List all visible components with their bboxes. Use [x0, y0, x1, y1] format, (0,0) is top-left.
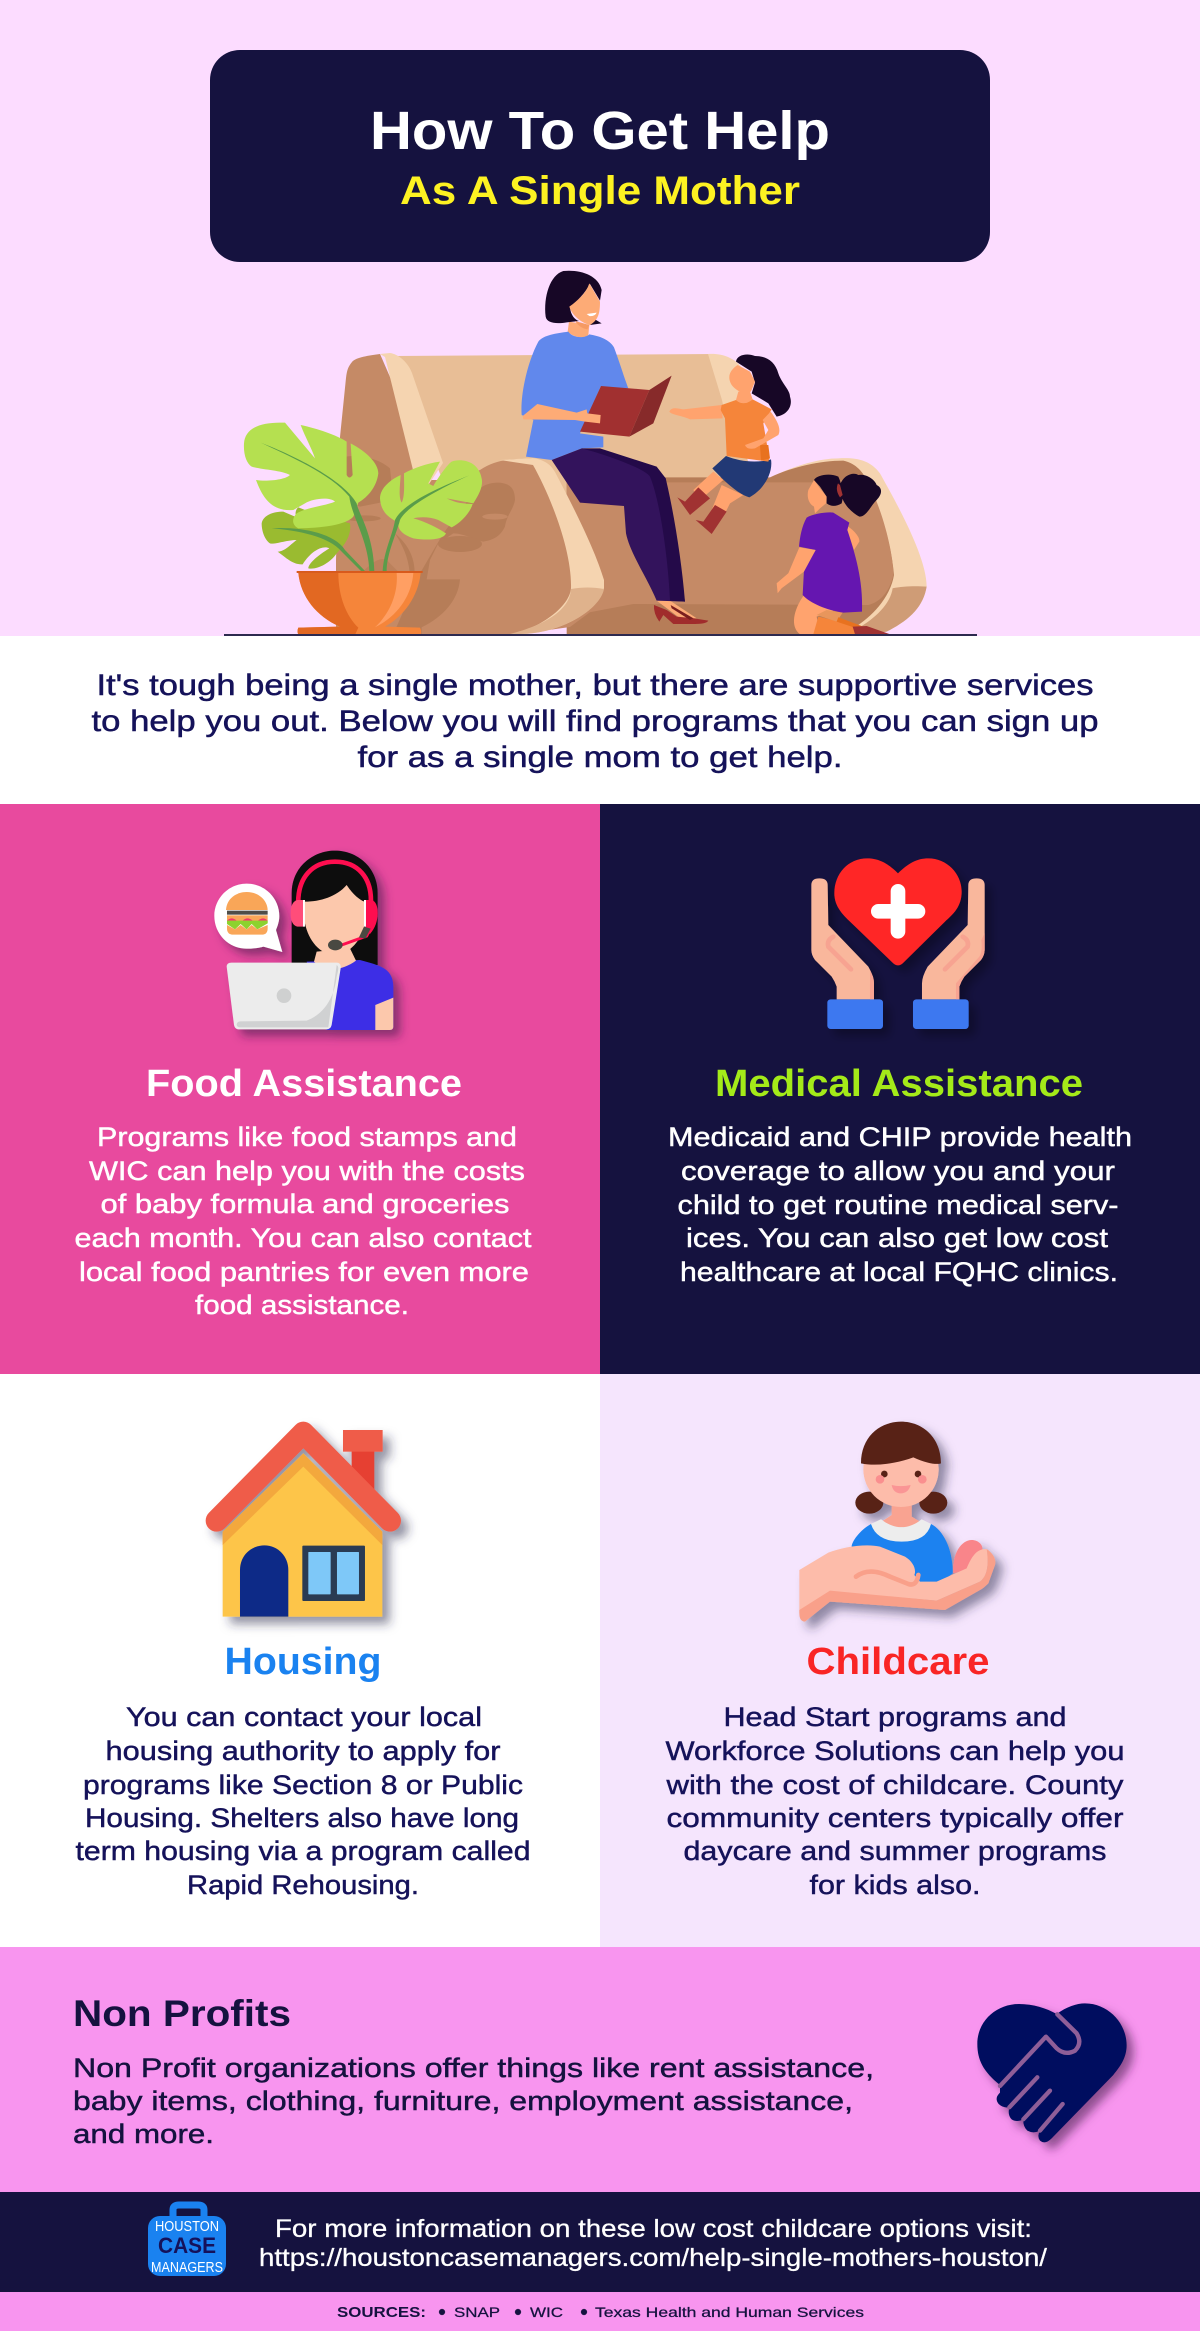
icon: child in hand — [799, 1422, 995, 1622]
panel: footer call to action — [0, 2192, 1200, 2292]
intro text: It's tough being a single mother, but there are supportive services — [96, 669, 1094, 702]
text: housing: housing authority to apply for — [106, 1736, 501, 1766]
mother — [521, 271, 708, 624]
older daughter — [669, 354, 791, 534]
sources list — [439, 2304, 864, 2320]
sources list: WIC — [530, 2304, 563, 2320]
sources label: SOURCES: — [337, 2304, 426, 2321]
text: food assistance: of baby formula and groceries — [100, 1189, 510, 1219]
heading: childcare: Childcare — [806, 1641, 990, 1683]
text: non profits: baby items, clothing, furniture, employment assistance, — [73, 2086, 853, 2116]
text: non profits: and more. — [73, 2119, 214, 2149]
text: food assistance: Programs like food stamps and — [97, 1122, 517, 1152]
younger daughter — [777, 474, 890, 634]
text: childcare: with the cost of childcare. County — [665, 1770, 1124, 1800]
heading: medical assistance: Medical Assistance — [715, 1063, 1083, 1105]
text: medical assistance — [668, 1122, 1132, 1287]
logo: houston case managers: CASE — [158, 2233, 216, 2258]
logo: houston case managers: MANAGERS — [151, 2259, 223, 2276]
intro text — [92, 669, 1098, 774]
sofa — [336, 353, 927, 634]
text: medical assistance: Medicaid and CHIP provide health — [668, 1122, 1132, 1152]
text: medical assistance: coverage to allow you and your — [681, 1156, 1115, 1186]
heading: food assistance: Food Assistance — [146, 1063, 462, 1105]
text: medical assistance: ices. You can also get low cost — [686, 1223, 1109, 1253]
sofa shadow of plant — [343, 456, 515, 634]
text: childcare: Head Start programs and — [724, 1702, 1066, 1732]
text: medical assistance: healthcare at local FQHC clinics. — [680, 1257, 1118, 1287]
text: medical assistance: child to get routine medical serv- — [678, 1190, 1118, 1220]
panel: food assistance — [0, 804, 600, 1374]
intro text: for as a single mom to get help. — [358, 741, 842, 774]
text: childcare: for kids also. — [810, 1870, 980, 1900]
text: housing: You can contact your local — [126, 1702, 482, 1732]
sources list: SNAP — [454, 2304, 500, 2320]
intro text: to help you out. Below you will find programs that you can sign up — [92, 705, 1098, 738]
sources list: Texas Health and Human Services — [595, 2304, 864, 2320]
heading: non profits: Non Profits — [73, 1993, 291, 2034]
text: non profits: Non Profit organizations offer things like rent assistance, — [73, 2053, 874, 2083]
title: How To Get Help — [370, 101, 830, 161]
text: food assistance: each month. You can also contact — [74, 1223, 532, 1253]
text: housing: term housing via a program called — [76, 1836, 530, 1866]
subtitle: As A Single Mother — [400, 169, 800, 213]
panel: childcare — [600, 1374, 1200, 1947]
icon: hands holding heart — [811, 858, 985, 1029]
panel: housing — [0, 1374, 600, 1947]
heading: housing: Housing — [224, 1641, 382, 1683]
icon: handshake heart — [977, 2003, 1127, 2142]
title box — [210, 50, 990, 262]
panel: header — [0, 0, 1200, 636]
text: more information: For more information on these low cost childcare options visit: — [275, 2215, 1032, 2243]
logo: houston case managers: HOUSTON — [155, 2218, 219, 2235]
panel: non profits — [0, 1947, 1200, 2192]
icon: house — [217, 1430, 390, 1617]
text: food assistance: food assistance. — [195, 1290, 409, 1320]
text: housing: Housing. Shelters also have long — [85, 1803, 519, 1833]
text: more information: https://houstoncasemanagers.com/help-single-mothers-houston/ — [259, 2244, 1047, 2272]
text: childcare: daycare and summer programs — [684, 1836, 1106, 1866]
text: housing — [76, 1702, 530, 1900]
text: childcare — [665, 1702, 1124, 1900]
text: more information — [259, 2215, 1047, 2272]
logo: houston case managers — [148, 2205, 226, 2276]
text: housing: programs like Section 8 or Public — [83, 1770, 523, 1800]
text: childcare: Workforce Solutions can help you — [666, 1736, 1124, 1766]
panel: introduction — [0, 636, 1200, 804]
illustration: mother reading to two daughters on a sofa — [244, 271, 927, 634]
text: childcare: community centers typically offer — [666, 1803, 1124, 1833]
text: non profits — [73, 2053, 874, 2149]
panel: medical assistance — [600, 804, 1200, 1374]
plant — [244, 423, 482, 634]
text: food assistance — [74, 1122, 532, 1320]
icon: headset operator with burger — [214, 851, 393, 1030]
text: housing: Rapid Rehousing. — [187, 1870, 419, 1900]
panel: sources — [0, 2292, 1200, 2331]
text: food assistance: local food pantries for even more — [79, 1257, 529, 1287]
text: food assistance: WIC can help you with the costs — [89, 1156, 525, 1186]
